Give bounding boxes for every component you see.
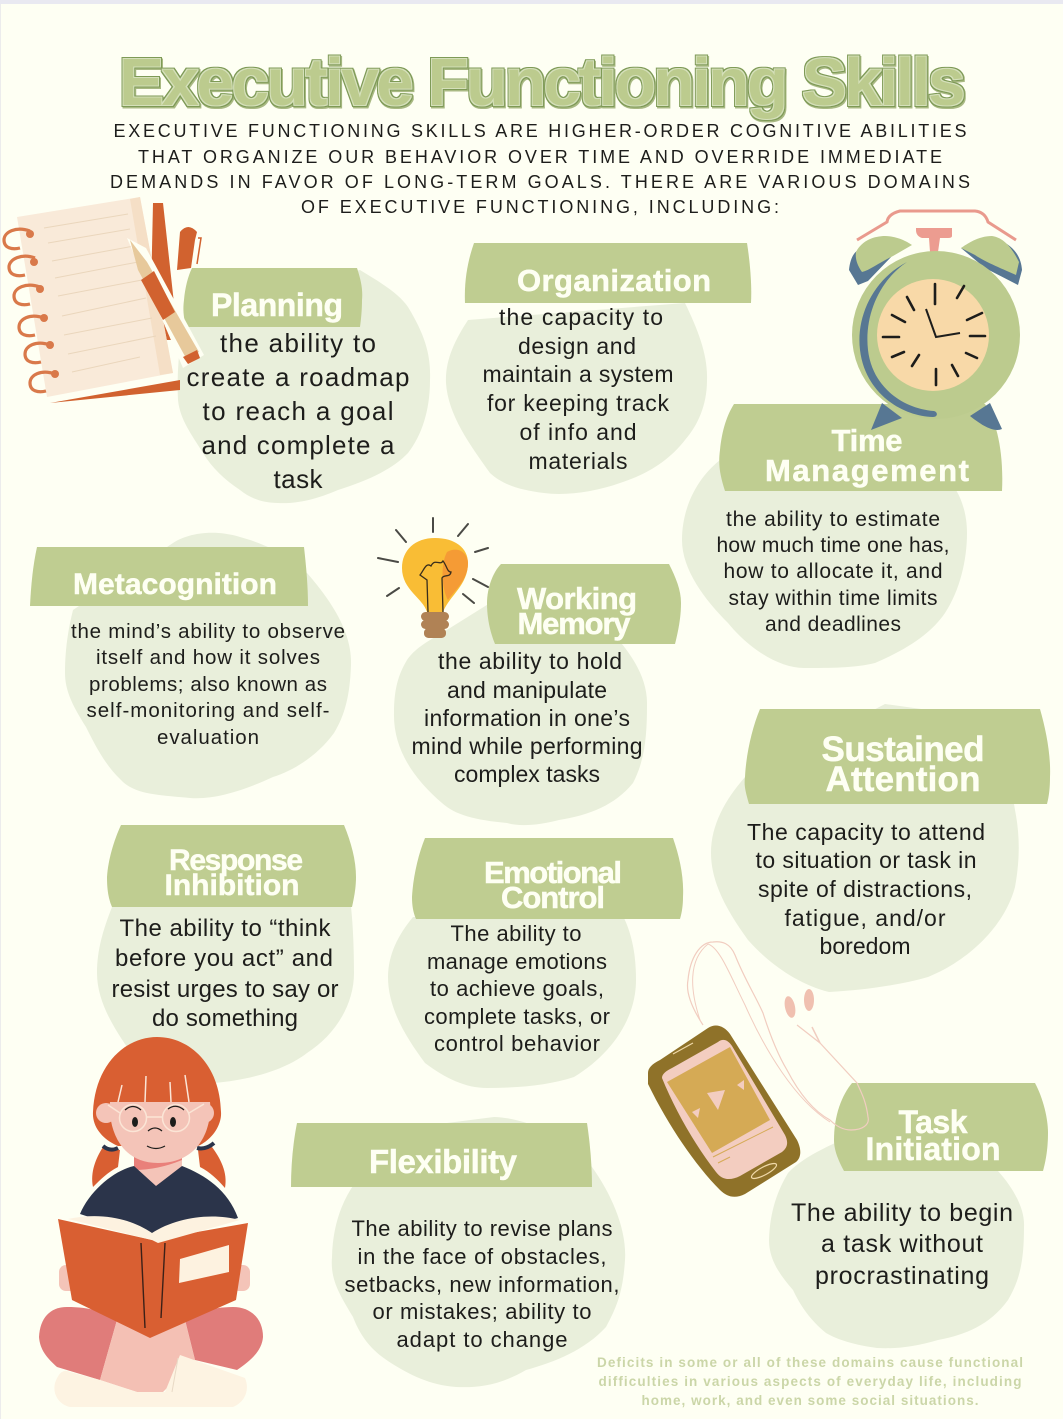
flexibility text: The ability to revise plans bbox=[352, 1216, 612, 1241]
sustained attention blob bbox=[711, 704, 1019, 992]
working memory banner bbox=[487, 564, 681, 644]
title: Executive Functioning Skills bbox=[119, 45, 963, 120]
task initiation text bbox=[791, 1199, 1013, 1290]
emotional control heading bbox=[484, 855, 622, 915]
emotional control heading: Emotional bbox=[484, 855, 622, 890]
planning text: create a roadmap bbox=[186, 362, 410, 392]
working memory text bbox=[412, 648, 642, 787]
response inhibition text bbox=[112, 915, 338, 1032]
panel: planning bbox=[178, 268, 430, 503]
planning text: task bbox=[274, 464, 324, 494]
task initiation text: The ability to begin bbox=[791, 1199, 1013, 1227]
flexibility text bbox=[344, 1216, 620, 1352]
time management heading bbox=[765, 423, 969, 488]
icon: girl reading a book bbox=[39, 1037, 263, 1407]
time management heading: Time bbox=[832, 423, 902, 458]
panel: time management bbox=[682, 404, 1002, 668]
task initiation text: a task without bbox=[821, 1230, 983, 1258]
icon: alarm clock bbox=[849, 211, 1022, 430]
time management text: how to allocate it, and bbox=[724, 560, 942, 583]
intro text: THAT ORGANIZE OUR BEHAVIOR OVER TIME AND OVERRIDE IMMEDIATE bbox=[138, 147, 942, 167]
emotional control text: to achieve goals, bbox=[430, 976, 604, 1001]
metacognition text: problems; also known as bbox=[89, 673, 327, 696]
task initiation heading: Initiation bbox=[866, 1131, 1000, 1167]
organization heading: Organization bbox=[517, 263, 711, 298]
intro text: DEMANDS IN FAVOR OF LONG-TERM GOALS. THERE ARE VARIOUS DOMAINS bbox=[110, 172, 970, 192]
task initiation banner bbox=[834, 1083, 1048, 1171]
sustained attention text: boredom bbox=[820, 933, 910, 959]
metacognition blob bbox=[65, 533, 351, 798]
response inhibition blob bbox=[97, 907, 354, 1083]
panel: flexibility bbox=[291, 1117, 625, 1387]
sustained attention text: spite of distractions, bbox=[758, 876, 972, 902]
task initiation text: procrastinating bbox=[815, 1262, 989, 1290]
sustained attention heading: Attention bbox=[826, 760, 980, 799]
icon: phone with earphones bbox=[648, 942, 868, 1197]
planning banner bbox=[183, 268, 362, 327]
time management text: and deadlines bbox=[765, 613, 901, 636]
working memory heading: Working bbox=[517, 581, 637, 616]
time management text: the ability to estimate bbox=[726, 508, 940, 531]
planning text: the ability to bbox=[220, 328, 376, 358]
organization text: for keeping track bbox=[487, 390, 670, 416]
footer note bbox=[597, 1355, 1023, 1408]
metacognition text: evaluation bbox=[157, 726, 259, 749]
time management heading: Management bbox=[765, 453, 969, 488]
working memory blob bbox=[394, 603, 647, 825]
panel: task initiation bbox=[769, 1083, 1048, 1348]
icon: light bulb bbox=[378, 518, 488, 638]
emotional control blob bbox=[388, 917, 636, 1088]
response inhibition heading: Inhibition bbox=[164, 869, 300, 902]
panel: metacognition bbox=[30, 533, 351, 798]
emotional control text: complete tasks, or bbox=[424, 1004, 610, 1029]
organization text bbox=[482, 304, 674, 474]
response inhibition banner bbox=[107, 825, 356, 907]
flexibility text: adapt to change bbox=[396, 1327, 568, 1352]
organization text: of info and bbox=[520, 419, 636, 445]
panel: sustained attention bbox=[711, 704, 1050, 992]
organization text: materials bbox=[528, 448, 628, 474]
intro text: OF EXECUTIVE FUNCTIONING, INCLUDING: bbox=[301, 197, 779, 217]
organization text: maintain a system bbox=[482, 361, 674, 387]
intro text: EXECUTIVE FUNCTIONING SKILLS ARE HIGHER-ORDER COGNITIVE ABILITIES bbox=[114, 121, 966, 141]
flexibility blob bbox=[332, 1117, 625, 1387]
emotional control text: The ability to bbox=[450, 921, 582, 946]
response inhibition text: resist urges to say or bbox=[112, 976, 338, 1003]
emotional control text bbox=[424, 921, 610, 1056]
response inhibition heading: Response bbox=[169, 844, 303, 877]
emotional control heading: Control bbox=[501, 880, 605, 915]
sustained attention heading bbox=[822, 730, 984, 799]
flexibility banner bbox=[291, 1123, 592, 1187]
time management blob bbox=[682, 460, 967, 668]
working memory text: mind while performing bbox=[412, 733, 642, 759]
organization banner bbox=[465, 243, 751, 303]
planning text: to reach a goal bbox=[202, 396, 394, 426]
organization text: design and bbox=[518, 333, 636, 359]
footer note: Deficits in some or all of these domains cause functional bbox=[597, 1355, 1023, 1370]
flexibility text: setbacks, new information, bbox=[344, 1272, 620, 1297]
panel: organization bbox=[446, 243, 751, 494]
response inhibition heading bbox=[164, 844, 303, 902]
sustained attention banner bbox=[745, 709, 1050, 804]
sustained attention text: The capacity to attend bbox=[747, 819, 985, 845]
icon: notebook and pen bbox=[4, 197, 204, 403]
working memory heading bbox=[517, 581, 637, 641]
metacognition text: self-monitoring and self- bbox=[86, 699, 330, 722]
working memory text: information in one’s bbox=[424, 705, 630, 731]
time management text: stay within time limits bbox=[728, 587, 938, 610]
intro text bbox=[110, 121, 970, 217]
working memory text: and manipulate bbox=[447, 677, 607, 703]
footer note: home, work, and even some social situations. bbox=[642, 1393, 978, 1408]
sustained attention text: fatigue, and/or bbox=[784, 905, 946, 931]
planning blob bbox=[178, 270, 430, 503]
working memory text: complex tasks bbox=[454, 761, 600, 787]
sustained attention heading: Sustained bbox=[822, 730, 984, 769]
time management text: how much time one has, bbox=[716, 534, 950, 557]
flexibility text: in the face of obstacles, bbox=[358, 1244, 606, 1269]
emotional control text: manage emotions bbox=[427, 949, 607, 974]
organization text: the capacity to bbox=[499, 304, 663, 330]
panel: response inhibition bbox=[97, 825, 356, 1083]
emotional control text: control behavior bbox=[434, 1031, 600, 1056]
response inhibition text: do something bbox=[152, 1005, 298, 1032]
planning text bbox=[186, 328, 410, 494]
task initiation blob bbox=[769, 1143, 1024, 1348]
response inhibition text: before you act” and bbox=[115, 945, 333, 972]
sustained attention text: to situation or task in bbox=[756, 847, 976, 873]
sustained attention text bbox=[747, 819, 985, 959]
metacognition text bbox=[71, 620, 345, 749]
metacognition text: itself and how it solves bbox=[96, 646, 320, 669]
footer note: difficulties in various aspects of everyday life, including bbox=[598, 1374, 1022, 1389]
working memory text: the ability to hold bbox=[438, 648, 622, 674]
task initiation heading bbox=[866, 1104, 1000, 1167]
metacognition text: the mind’s ability to observe bbox=[71, 620, 345, 643]
task initiation heading: Task bbox=[898, 1104, 968, 1140]
flexibility text: or mistakes; ability to bbox=[372, 1299, 592, 1324]
time management banner bbox=[719, 404, 1002, 491]
panel: emotional control bbox=[388, 838, 683, 1088]
metacognition heading: Metacognition bbox=[73, 568, 277, 601]
flexibility heading: Flexibility bbox=[369, 1143, 518, 1180]
emotional control banner bbox=[412, 838, 683, 919]
organization blob bbox=[446, 303, 707, 494]
time management text bbox=[716, 508, 950, 636]
planning text: and complete a bbox=[202, 430, 395, 460]
working memory heading: Memory bbox=[518, 606, 631, 641]
response inhibition text: The ability to “think bbox=[120, 915, 332, 942]
panel: working memory bbox=[394, 564, 681, 825]
planning heading: Planning bbox=[211, 287, 343, 323]
metacognition banner bbox=[30, 547, 308, 606]
